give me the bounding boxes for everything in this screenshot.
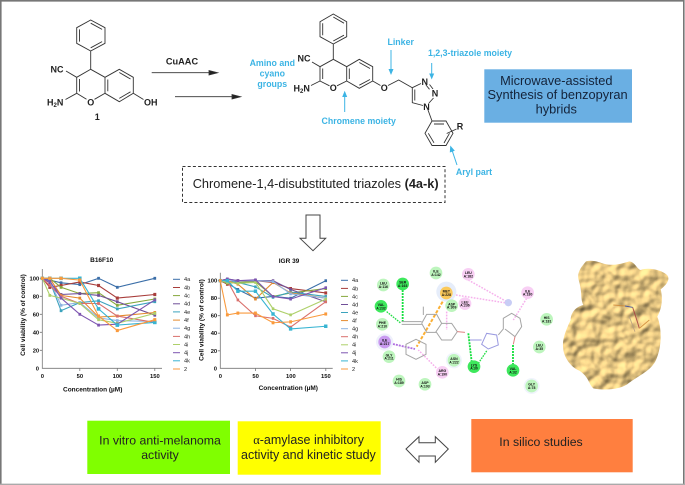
annotation: amino and cyano groups: groups [257,79,287,89]
residue nodes: A:35 [536,347,543,351]
legend: 4a [352,278,359,284]
product molecule: chromene triazole: N [422,77,428,87]
x axis label: Concentration (µM) [63,386,122,394]
protein surface [563,261,668,390]
product molecule: chromene triazole: N [303,84,310,94]
legend: 4j [184,351,188,357]
residue nodes: VAL [378,303,384,307]
legend: 4e [352,310,358,316]
legend: 4e [184,310,190,316]
chart title: IGR 39 [279,258,300,265]
axis tick labels: 80 [33,294,39,300]
axis tick labels [208,279,331,380]
panel: in vitro anti-melanoma activity [87,421,230,474]
residue nodes: A:181 [542,319,551,323]
axis tick labels: 50 [77,374,83,380]
residue nodes: ILE [525,289,530,293]
legend: 4g [184,326,190,332]
halos [376,282,540,394]
residue nodes: SER [399,281,406,285]
interaction lines [387,280,527,370]
residue nodes: A:189 [394,381,404,385]
ligand skeleton [402,307,522,359]
legend: 4c [352,294,358,300]
residue nodes: LEU [380,282,387,286]
residue nodes: GLY [386,353,392,357]
product molecule: chromene triazole: R [457,122,464,132]
residue nodes: ASP [421,381,429,385]
residue nodes: A:180 [523,293,532,297]
product molecule: chromene triazole: O [381,83,388,93]
reactant molecule: compound 1: 1 [95,112,100,122]
legend: 4f [184,318,189,324]
residue nodes: ASP [448,302,455,306]
axis tick labels: 100 [113,374,122,380]
residue nodes: A:193 [420,384,430,388]
residue nodes: LEU [536,344,543,348]
legend: 2 [352,367,355,373]
axis tick labels: 0 [214,366,217,372]
reactant molecule: compound 1 [47,20,158,122]
data series [42,278,155,330]
callout: chromene-1,4-disubstituted triazoles: Chromene-1,4-disubstituted triazoles (4a-k) [193,176,439,191]
legend: 4d [352,302,358,308]
residue nodes: A:116 [379,285,388,289]
residue nodes: PHE [379,321,386,325]
residue nodes: HIS [396,378,402,382]
axes [40,269,162,371]
legend: 4k [352,359,358,365]
chart title: B16F10 [90,257,114,264]
axis tick labels: 0 [219,374,222,380]
axes [218,273,333,371]
arrow: double-headed [406,437,448,462]
annotation: amino and cyano groups [250,58,295,89]
panel: in vitro anti-melanoma activity: activity [141,448,180,462]
annotation: 1,2,3-triazole moiety [428,48,512,80]
axis tick labels: 80 [211,296,217,302]
panel: microwave-assisted synthesis: hybrids [536,102,577,117]
panel: alpha-amylase inhibitory activity: activity and kinetic study [241,448,377,462]
residue nodes: LEU [461,300,468,304]
legend: 4c [184,294,190,300]
product molecule: chromene triazole: H [294,84,300,94]
product molecule: chromene triazole: O [330,83,337,93]
axis tick labels: 20 [33,348,39,354]
residue nodes: A:163 [398,284,407,288]
product molecule: chromene triazole: N [432,88,438,98]
panel: in silico studies [471,419,633,472]
product molecule: chromene triazole: NC [298,54,311,64]
annotation: linker: Linker [387,37,414,47]
panel: alpha-amylase inhibitory activity: α-amylase inhibitory [253,433,365,447]
annotation: linker [387,37,414,75]
residue nodes: A:210 [378,324,387,328]
residue nodes: A:236 [460,304,470,308]
legend: 4h [352,335,358,341]
legend [341,278,359,373]
arrow: CuAAC reaction [152,70,218,75]
annotation: chromene moiety: Chromene moiety [322,116,396,126]
annotation: aryl part: Aryl part [456,167,492,177]
y axis label: Cell viability (% of control) [198,279,206,361]
annotation: amino and cyano groups: cyano [260,68,286,78]
legend: 4i [352,343,356,349]
reaction label: CuAAC: CuAAC [166,56,198,66]
axis tick labels: 100 [208,279,217,285]
callout: chromene-1,4-disubstituted triazoles [182,166,445,202]
product molecule: chromene triazole [294,14,464,146]
axis tick labels: 40 [211,331,217,337]
legend: 4i [184,342,188,348]
residue nodes [375,267,553,392]
legend: 4a [184,277,191,283]
reactant molecule: compound 1: 2 [54,103,58,109]
legend: 4d [184,302,190,308]
axis tick labels: 0 [41,374,44,380]
residue nodes: LYS [471,363,477,367]
residue nodes: A:142 [431,273,441,277]
axis tick labels: 150 [150,374,160,380]
legend: 4k [184,359,190,365]
axis tick labels: 0 [36,366,39,372]
axis tick labels: 20 [211,349,217,355]
bound ligand [613,305,649,332]
reactant molecule: compound 1: N [57,98,63,108]
panel: alpha-amylase inhibitory activity [238,421,381,475]
residue nodes: ILE [382,339,387,343]
axis tick labels: 100 [286,374,296,380]
legend [173,277,191,373]
residue nodes: A:211 [384,357,394,361]
residue nodes: A:32 [509,370,517,374]
residue nodes: A:232 [376,306,386,310]
product molecule: chromene triazole: 2 [300,89,304,95]
axis tick labels: 40 [33,330,39,336]
arrow: to product [175,94,241,99]
surface body [563,261,668,390]
legend: 4b [184,285,190,291]
legend: 4f [352,318,357,324]
residue nodes: ASN [450,357,458,361]
data series [220,279,326,329]
residue nodes: VAL [510,367,516,371]
residue nodes: A:78 [528,386,535,390]
panel: microwave-assisted synthesis: Microwave-assisted [500,73,612,88]
residue nodes: MET [443,290,450,294]
residue nodes: LEU [465,271,472,275]
annotation: chromene moiety [322,91,396,126]
line chart: B16F10 [20,257,191,394]
arrow: down outline [300,215,326,251]
residue nodes: A:217 [380,342,389,346]
residue nodes: HIS [544,316,550,320]
product molecule: chromene triazole: N [423,102,430,112]
reactant molecule: compound 1: O [87,98,94,108]
line chart: IGR 39 [198,258,359,392]
residue nodes: A:228 [442,293,451,297]
axis tick labels [30,276,160,380]
axis tick labels: 60 [33,312,39,318]
panel: in vitro anti-melanoma activity: In vitro anti-melanoma [99,434,221,448]
residue nodes: A:309 [447,306,456,310]
annotation: amino and cyano groups: Amino and [250,58,295,68]
residue nodes: ARG [438,369,446,373]
panel: microwave-assisted synthesis: Synthesis of benzopyran [488,87,628,102]
legend: 4g [352,327,358,333]
panel: in silico studies: In silico studies [499,435,583,449]
y axis label: Cell viability (% of control) [20,274,27,356]
docking interaction diagram [375,267,553,394]
annotation: aryl part [450,146,492,177]
axis tick labels: 150 [321,374,331,380]
residue nodes: A:182 [464,274,473,278]
reactant molecule: compound 1: NC [50,64,64,74]
residue nodes: A:190 [438,372,447,376]
axis tick labels: 60 [211,314,217,320]
legend: 4b [352,286,358,292]
legend: 4h [184,334,190,340]
residue nodes: ILE [433,270,439,274]
legend: 4j [352,351,356,357]
axis tick labels: 100 [30,276,39,282]
legend: 2 [184,367,187,373]
panel: microwave-assisted synthesis [484,69,632,123]
residue nodes: GLY [528,383,535,387]
residue nodes: A:222 [449,360,459,364]
annotation: 1,2,3-triazole moiety: 1,2,3-triazole moiety [428,48,512,58]
x axis label: Concentration (µM) [259,385,318,392]
residue nodes: A:30 [470,367,478,371]
reactant molecule: compound 1: OH [144,98,158,108]
reactant molecule: compound 1: H [47,98,54,108]
axis tick labels: 50 [252,374,259,380]
